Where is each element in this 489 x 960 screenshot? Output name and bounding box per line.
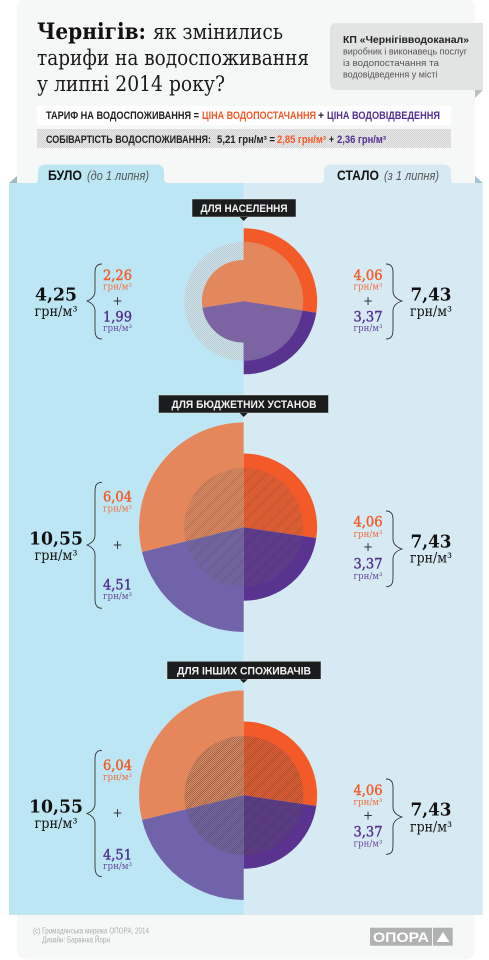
tab: before: БУЛО bbox=[48, 168, 82, 183]
title: тарифи на водоспоживання bbox=[37, 46, 309, 71]
values: after other consumers: 7,43 bbox=[410, 800, 452, 821]
chart: budget institutions bbox=[139, 422, 317, 632]
title: Чернігів: bbox=[37, 19, 146, 45]
values: after budget institutions: грн/м³ bbox=[410, 551, 452, 567]
label: budget institutions bbox=[158, 395, 328, 417]
values: after other consumers: + bbox=[363, 808, 373, 822]
label: other consumers bbox=[167, 661, 321, 683]
section: other consumers bbox=[29, 661, 452, 900]
formula: tariff bbox=[37, 106, 451, 125]
values: after other consumers: грн/м³ bbox=[410, 820, 452, 836]
fold: left bbox=[9, 176, 17, 183]
section: budget institutions bbox=[29, 395, 452, 632]
chart: population bbox=[184, 228, 317, 374]
formula: cost: 2,85 грн/м³ bbox=[277, 134, 326, 146]
values: before population: 1,99 bbox=[103, 310, 132, 326]
values: before population: + bbox=[112, 294, 123, 308]
values: before other consumers: 10,55 bbox=[29, 796, 83, 817]
values: after population: грн/м³ bbox=[354, 282, 383, 292]
label: other consumers: ДЛЯ ІНШИХ СПОЖИВАЧІВ bbox=[177, 665, 311, 677]
values: after budget institutions: 4,06 bbox=[354, 515, 382, 531]
values: after budget institutions: + bbox=[363, 540, 373, 554]
values: before population: грн/м³ bbox=[103, 282, 132, 292]
values: after other consumers: грн/м³ bbox=[354, 840, 383, 850]
chart: other consumers bbox=[139, 690, 317, 900]
values: before population: 4,25 bbox=[35, 285, 77, 306]
formula: cost bbox=[37, 129, 451, 148]
title bbox=[37, 19, 309, 97]
values: before population bbox=[34, 264, 132, 339]
values: after population: грн/м³ bbox=[410, 304, 452, 320]
values: after budget institutions: 3,37 bbox=[354, 557, 382, 573]
values: before other consumers: грн/м³ bbox=[103, 862, 132, 872]
tab: after: (з 1 липня) bbox=[384, 169, 439, 183]
title: у липні 2014 року? bbox=[37, 72, 225, 97]
formula: tariff: + bbox=[318, 110, 324, 122]
values: before population: 2,26 bbox=[103, 268, 132, 284]
formula: cost: 5,21 грн/м³ = bbox=[217, 134, 275, 146]
values: before other consumers: 6,04 bbox=[103, 758, 132, 774]
header card bbox=[17, 0, 475, 190]
values: before budget institutions: 10,55 bbox=[29, 528, 83, 549]
values: after budget institutions bbox=[354, 511, 452, 587]
tab: after: СТАЛО bbox=[337, 168, 379, 183]
values: before other consumers: грн/м³ bbox=[34, 816, 78, 832]
values: after budget institutions: грн/м³ bbox=[354, 530, 383, 540]
values: before budget institutions bbox=[29, 482, 132, 608]
label: budget institutions: ДЛЯ БЮДЖЕТНИХ УСТАНОВ bbox=[172, 399, 317, 411]
values: before other consumers bbox=[29, 750, 132, 877]
label: population bbox=[192, 199, 296, 221]
values: after population: 3,37 bbox=[354, 310, 382, 326]
title: як змінились bbox=[153, 20, 283, 45]
callout: operator: виробник і виконавець послуг bbox=[343, 46, 467, 58]
callout: operator: із водопостачання та bbox=[343, 58, 440, 69]
values: after budget institutions: грн/м³ bbox=[354, 572, 383, 582]
footer credits: Дизайн: Барвінка Йорн bbox=[42, 935, 110, 944]
footer credits bbox=[33, 926, 149, 944]
footer card bbox=[17, 910, 475, 960]
formula: cost: 2,36 грн/м³ bbox=[337, 134, 386, 146]
values: after other consumers: 3,37 bbox=[354, 825, 382, 841]
callout: operator: водовідведення у місті bbox=[343, 70, 438, 80]
footer credits: (с) Громадянська мережа ОПОРА, 2014 bbox=[33, 926, 149, 935]
values: before other consumers: 4,51 bbox=[103, 847, 132, 863]
panel: after bbox=[244, 183, 483, 915]
values: after population: 7,43 bbox=[410, 285, 452, 306]
callout: operator bbox=[330, 23, 483, 98]
values: after population: + bbox=[363, 294, 373, 308]
section: population bbox=[34, 199, 452, 374]
values: before other consumers: грн/м³ bbox=[103, 773, 132, 783]
callout: operator: КП «Чернігівводоканал» bbox=[343, 35, 469, 46]
values: before population: грн/м³ bbox=[103, 324, 132, 334]
formula: tariff: ТАРИФ НА ВОДОСПОЖИВАННЯ = bbox=[46, 110, 199, 122]
logo: OPORA bbox=[370, 928, 453, 946]
values: after other consumers: 4,06 bbox=[354, 783, 382, 799]
values: after population: грн/м³ bbox=[354, 324, 383, 334]
values: before budget institutions: грн/м³ bbox=[103, 504, 132, 514]
values: before budget institutions: грн/м³ bbox=[34, 548, 78, 564]
tab: before bbox=[34, 164, 170, 184]
values: after population bbox=[354, 264, 452, 339]
values: before budget institutions: 4,51 bbox=[103, 577, 132, 593]
panel: before bbox=[9, 183, 244, 915]
tab: after bbox=[318, 164, 455, 184]
values: before other consumers: + bbox=[112, 806, 123, 820]
values: after other consumers bbox=[354, 779, 452, 854]
formula: cost: + bbox=[329, 134, 334, 146]
values: after other consumers: грн/м³ bbox=[354, 798, 383, 808]
tab: before: (до 1 липня) bbox=[87, 169, 149, 183]
formula: tariff: ЦІНА ВОДОВІДВЕДЕННЯ bbox=[327, 110, 440, 122]
formula: cost: СОБІВАРТІСТЬ ВОДОСПОЖИВАННЯ: bbox=[46, 134, 211, 146]
formula: tariff: ЦІНА ВОДОПОСТАЧАННЯ bbox=[202, 110, 316, 122]
values: before budget institutions: грн/м³ bbox=[103, 592, 132, 602]
values: before budget institutions: 6,04 bbox=[103, 490, 132, 506]
values: after population: 4,06 bbox=[354, 268, 382, 284]
values: after budget institutions: 7,43 bbox=[410, 531, 452, 552]
label: population: ДЛЯ НАСЕЛЕННЯ bbox=[200, 203, 288, 215]
values: before budget institutions: + bbox=[112, 538, 123, 552]
fold: right bbox=[475, 176, 483, 183]
logo: OPORA: ОПОРА bbox=[373, 929, 429, 945]
values: before population: грн/м³ bbox=[34, 304, 78, 320]
